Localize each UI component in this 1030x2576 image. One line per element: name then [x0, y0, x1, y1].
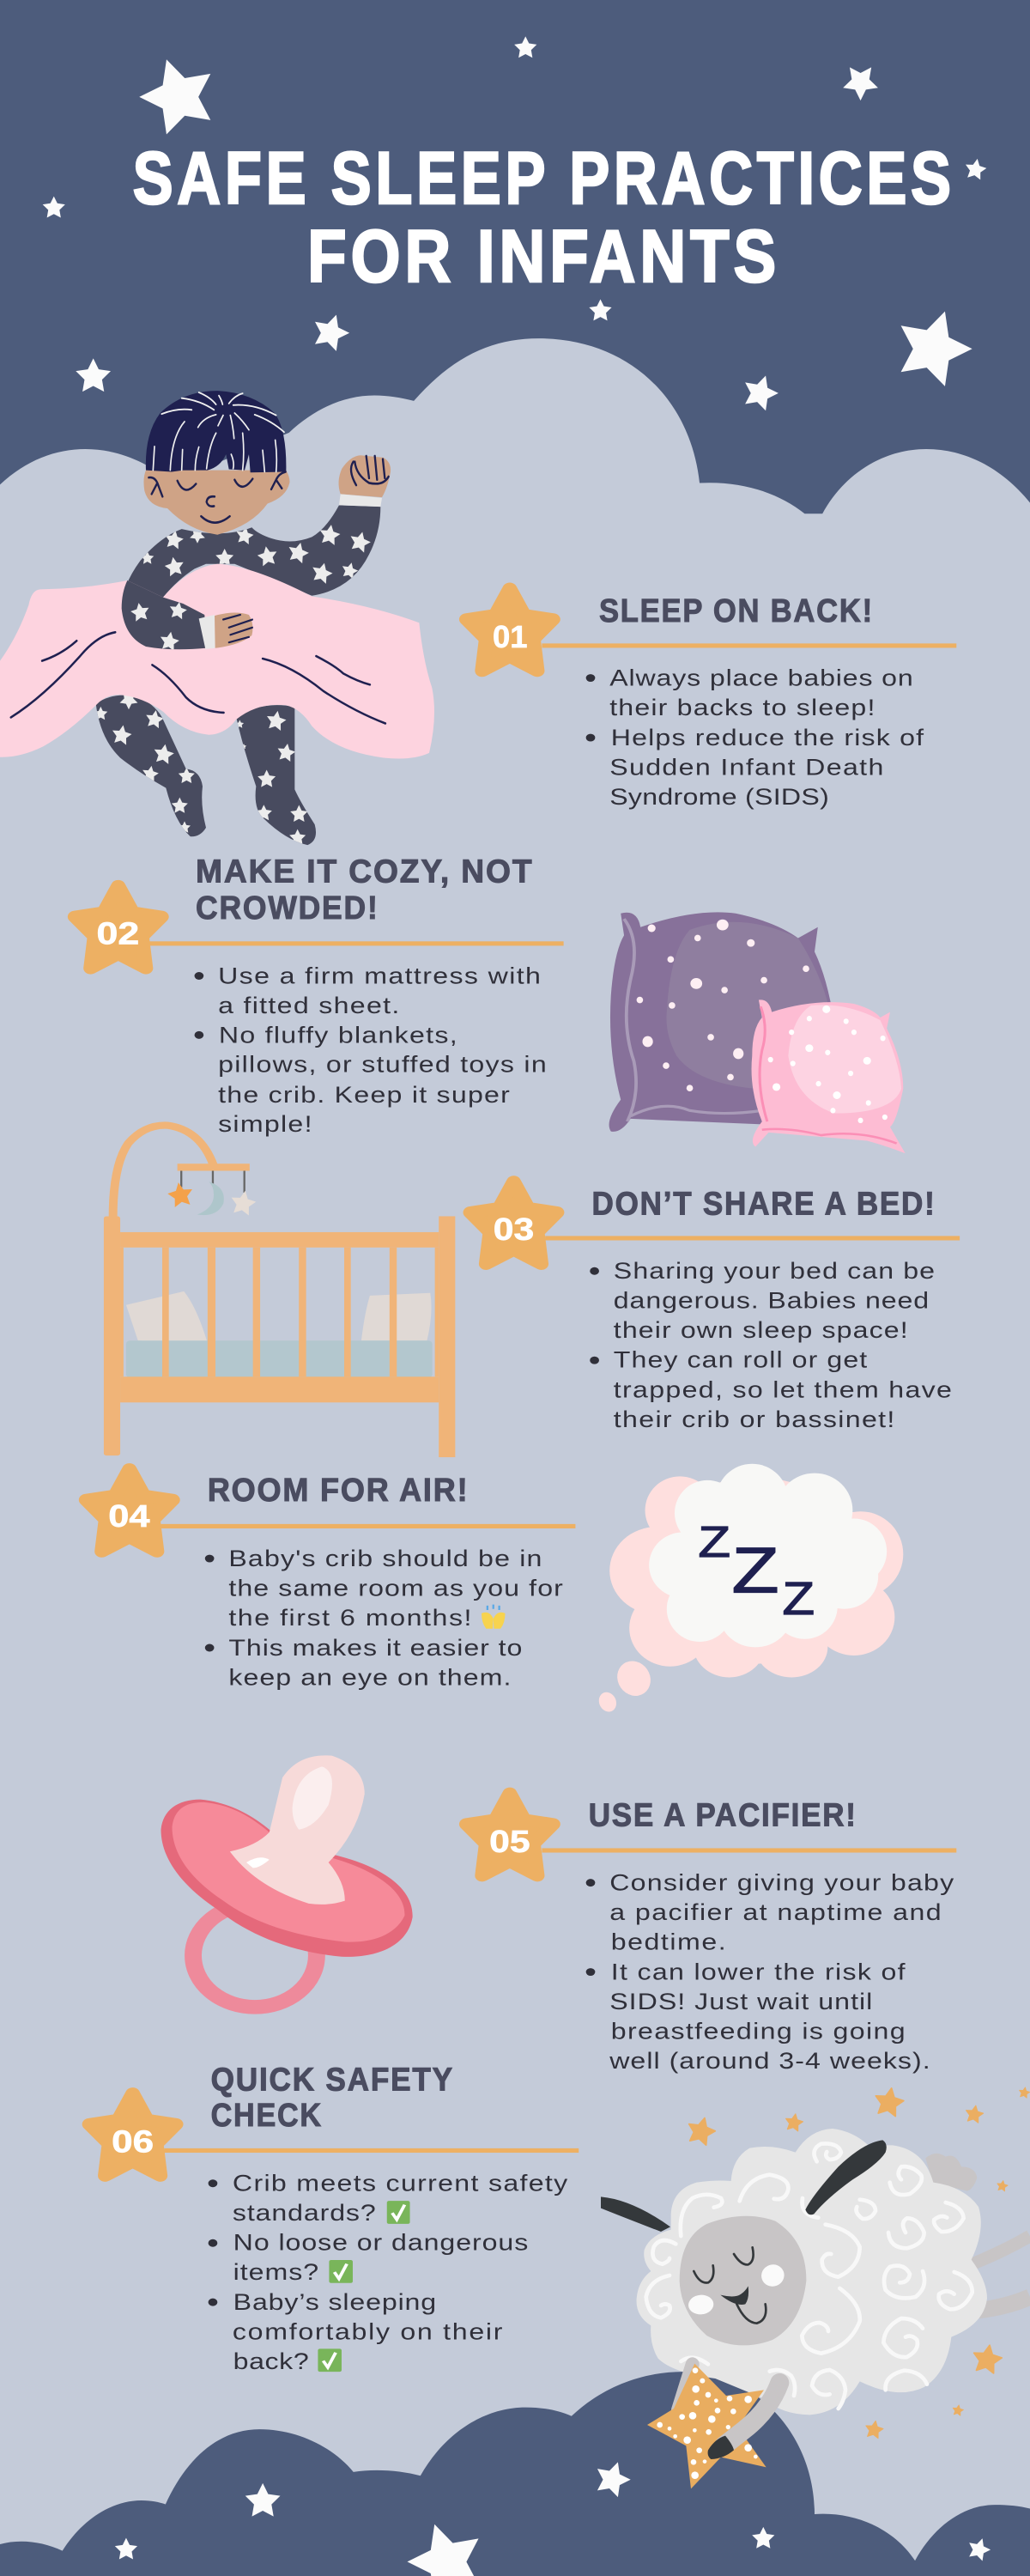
badge: 05 [466, 1794, 553, 1875]
section: pacifier, quick check, bottom clouds [0, 1755, 1030, 2576]
panel: 01 sleep on back [466, 589, 956, 810]
heading: sleep on back: SLEEP ON BACK! [599, 592, 874, 629]
text: safety check bullets: items? [233, 2259, 318, 2285]
illustration: pillows [609, 912, 906, 1153]
text: pacifier bullets: It can lower the risk of [611, 1959, 906, 1985]
text: room for air bullets: the same room as you for [228, 1576, 563, 1601]
heading: make it cozy [196, 853, 533, 926]
illustration: sleeping baby with blanket [0, 391, 434, 845]
illustration: pacifier [161, 1755, 413, 2007]
text: sleep on back bullets [586, 665, 924, 810]
heading: quick safety check [211, 2061, 454, 2133]
text: pacifier bullets: breastfeeding is going [611, 2019, 906, 2044]
text: bed sharing bullets: their crib or bassinet! [614, 1406, 894, 1432]
heading: room for air: ROOM FOR AIR! [208, 1472, 469, 1508]
badge: 06 [89, 2093, 176, 2176]
heading: quick safety check: QUICK SAFETY [211, 2061, 454, 2097]
text: pacifier bullets: Consider giving your baby [609, 1870, 954, 1896]
panel: 06 quick safety check [89, 2061, 579, 2374]
icon: raised hands [482, 1605, 506, 1629]
badge: 06: 06 [112, 2125, 154, 2160]
text: safety check bullets [209, 2171, 567, 2374]
text: bed sharing bullets: They can roll or get [614, 1347, 867, 1373]
title [133, 137, 955, 298]
text: room for air bullets: Baby's crib should be in [228, 1546, 542, 1571]
text: pacifier bullets [586, 1870, 954, 2074]
text: safety check bullets: comfortably on their [233, 2319, 503, 2345]
text: pacifier bullets: well (around 3-4 weeks). [609, 2048, 930, 2074]
illustration: zzz thought bubble [597, 1464, 903, 1713]
badge: 04 [86, 1469, 173, 1552]
section: cozy, bed sharing, room for air [75, 853, 960, 1713]
heading: make it cozy: CROWDED! [196, 890, 379, 926]
panel: 03 don't share a bed [470, 1182, 960, 1432]
text: bed sharing bullets: dangerous. Babies need [614, 1288, 929, 1314]
text: bed sharing bullets: their own sleep space! [614, 1318, 908, 1343]
text: safety check bullets: Crib meets current safety [233, 2171, 567, 2196]
text: room for air bullets: keep an eye on them. [228, 1665, 511, 1691]
text: pacifier bullets: a pacifier at naptime and [609, 1899, 942, 1925]
illustration: crib with mobile [104, 1126, 455, 1457]
heading: use a pacifier: USE A PACIFIER! [589, 1796, 857, 1832]
icon: check mark one [387, 2201, 410, 2224]
text: pacifier bullets: bedtime. [611, 1929, 726, 1955]
heading: quick safety check: CHECK [211, 2096, 323, 2133]
text: safety check bullets: No loose or dangerous [233, 2230, 528, 2256]
stars: bottom clouds [115, 2457, 993, 2576]
illustration: sheep holding star [601, 2086, 1030, 2488]
text: zzz: Z [732, 1534, 779, 1607]
text: cozy bullets: the crib. Keep it super [218, 1082, 510, 1108]
stars: night sky [43, 36, 988, 413]
badge: 02: 02 [97, 917, 139, 951]
text: sleep on back bullets: Helps reduce the risk of [611, 725, 924, 750]
text: safety check bullets: Baby’s sleeping [233, 2290, 436, 2315]
text: sleep on back bullets: Always place babies on [609, 665, 913, 691]
cloud: bottom navy clouds [0, 2372, 1030, 2576]
cloud: top cloud bank [0, 338, 1030, 548]
text: bed sharing bullets: trapped, so let them have [614, 1377, 952, 1403]
text: safety check bullets: standards? [233, 2201, 376, 2226]
heading: don't share a bed: DON’T SHARE A BED! [592, 1185, 936, 1222]
text: room for air bullets [205, 1546, 563, 1691]
text: cozy bullets: No fluffy blankets, [219, 1023, 457, 1048]
text: sleep on back bullets: Sudden Infant Death [609, 755, 883, 781]
badge: 05: 05 [489, 1825, 530, 1859]
text: cozy bullets: pillows, or stuffed toys in [218, 1052, 547, 1078]
text: sleep on back bullets: their backs to sleep! [609, 695, 875, 720]
text: room for air bullets: the first 6 months! [228, 1605, 471, 1631]
text: bed sharing bullets [590, 1259, 952, 1432]
icon: check mark two [329, 2260, 353, 2283]
badge: 01: 01 [493, 620, 528, 654]
text: bed sharing bullets: Sharing your bed can be [614, 1259, 935, 1284]
badge: 02 [75, 886, 161, 969]
icon: check mark three [318, 2348, 342, 2372]
panel: 04 room for air [86, 1469, 575, 1691]
panel: 02 make it cozy [75, 853, 564, 1138]
text: zzz [699, 1517, 815, 1625]
text: sleep on back bullets: Syndrome (SIDS) [609, 784, 829, 810]
badge: 04: 04 [108, 1499, 150, 1534]
badge: 01 [466, 589, 553, 671]
badge: 03: 03 [494, 1212, 534, 1247]
text: cozy bullets [195, 963, 547, 1138]
text: zzz: Z [699, 1517, 730, 1566]
text: safety check bullets: back? [233, 2348, 309, 2374]
badge: 03 [470, 1182, 557, 1264]
panel: 05 use a pacifier [466, 1794, 956, 2074]
section: top sky and title [0, 0, 1030, 548]
heading: make it cozy: MAKE IT COZY, NOT [196, 853, 533, 890]
text: zzz: Z [782, 1572, 815, 1625]
text: room for air bullets: This makes it easier to [228, 1635, 522, 1661]
text: pacifier bullets: SIDS! Just wait until [609, 1989, 872, 2014]
text: cozy bullets: a fitted sheet. [218, 993, 399, 1018]
title: FOR INFANTS [307, 216, 780, 298]
text: cozy bullets: Use a firm mattress with [218, 963, 541, 989]
text: cozy bullets: simple! [218, 1112, 312, 1138]
